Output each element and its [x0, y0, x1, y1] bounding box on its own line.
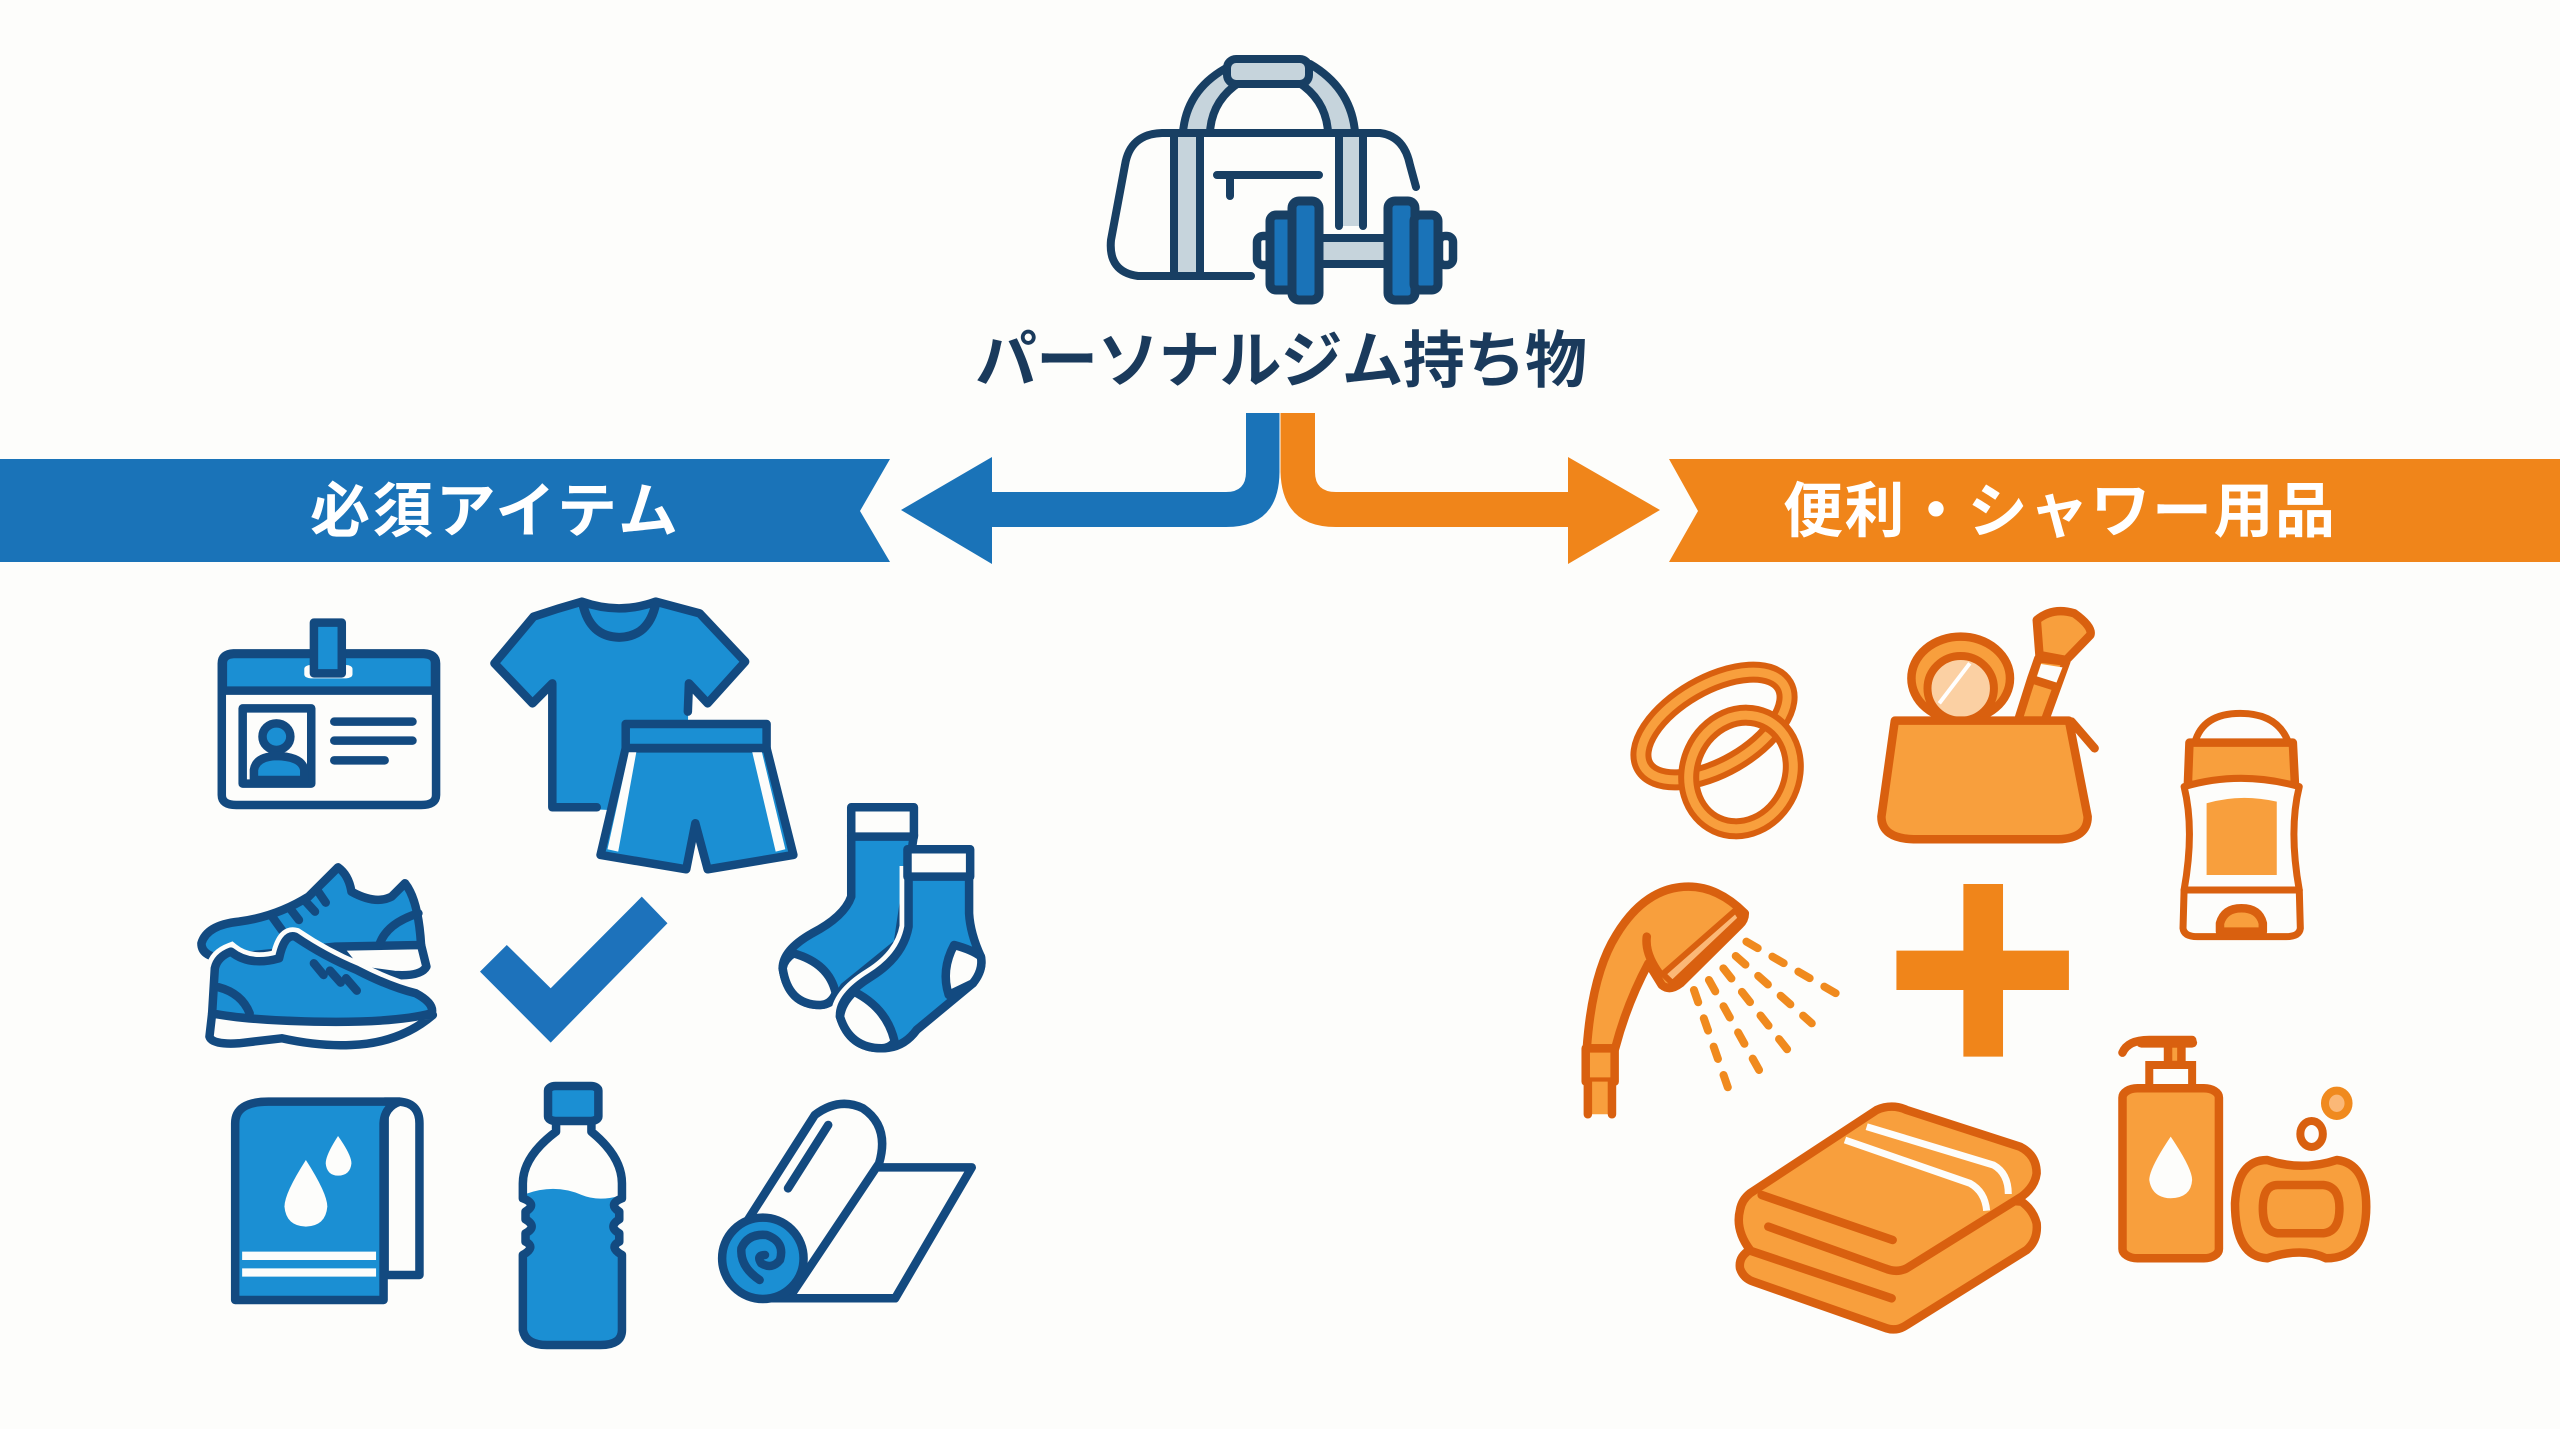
banner: convenience and shower items: 便利・シャワー用品 — [1783, 478, 2335, 545]
icon: deodorant stick — [2183, 713, 2300, 937]
icon: pump bottle — [2122, 1040, 2219, 1258]
icon: hair bands — [1623, 650, 1812, 846]
icon: plus sign — [1896, 884, 2069, 1057]
arrow: orange to the right — [1280, 413, 1660, 564]
icon: socks — [783, 807, 981, 1048]
arrow: blue to the left — [901, 413, 1280, 564]
icon: makeup pouch with mirror and brush — [1881, 611, 2095, 839]
icon: sweat towel — [235, 1102, 419, 1300]
icon: soap bar with bubbles — [2235, 1091, 2366, 1258]
icon: gym bag with dumbbell — [1111, 59, 1453, 300]
icon: folded towels — [1739, 1107, 2037, 1329]
banner: essential items — [0, 459, 890, 562]
title: パーソナルジム持ち物 — [975, 327, 1587, 396]
icon: t-shirt — [494, 602, 745, 810]
icon: yoga mat — [722, 1104, 972, 1299]
icon: shorts — [601, 724, 793, 869]
banner: essential items: 必須アイテム — [310, 478, 678, 545]
icon: sports shoes — [201, 867, 433, 1045]
icon: water bottle — [523, 1086, 622, 1345]
icon: shower head — [1586, 887, 1836, 1114]
icon: ID card — [222, 623, 436, 805]
icon: check mark — [480, 897, 667, 1043]
banner: convenience and shower items — [1669, 459, 2560, 562]
